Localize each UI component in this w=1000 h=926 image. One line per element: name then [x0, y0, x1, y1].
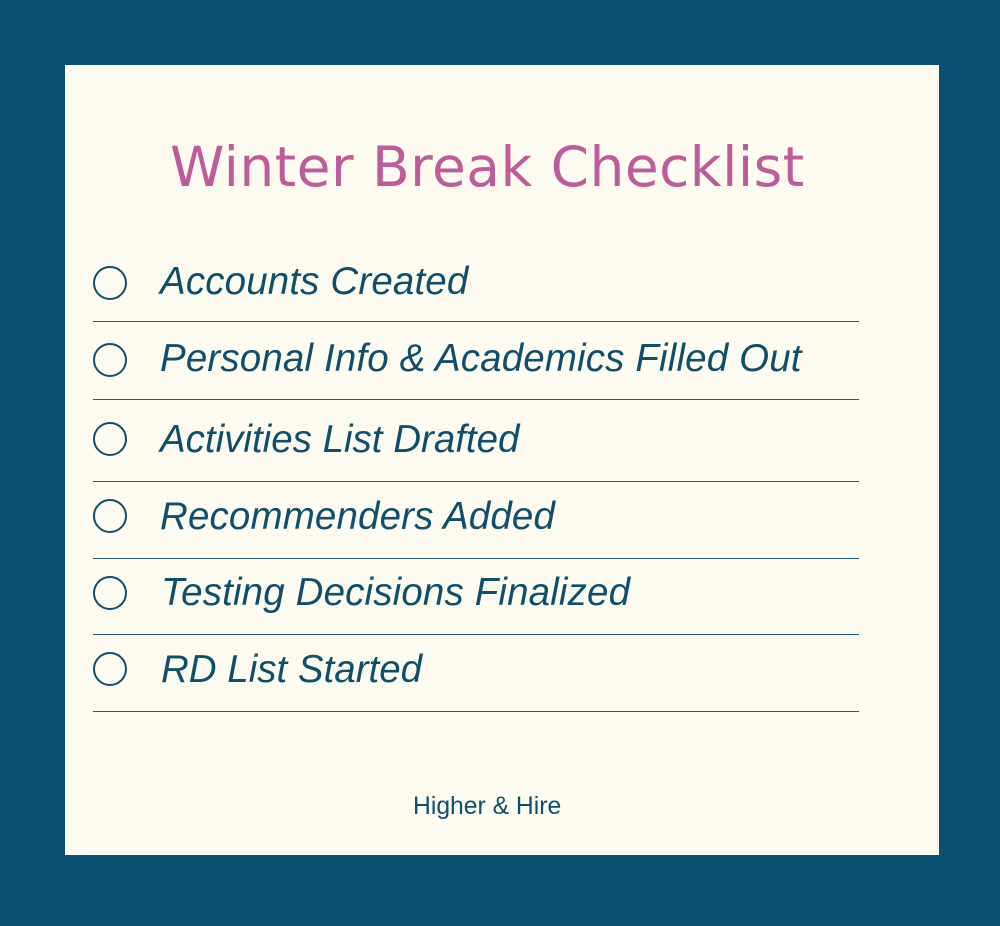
title: Winter Break Checklist [170, 135, 805, 199]
checklist item: Accounts Created [93, 260, 859, 322]
checklist item: RD List [93, 648, 859, 712]
text: Recommenders Added [160, 495, 555, 538]
text: Personal Info & Academics Filled Out [160, 337, 802, 380]
footer credit: Higher & Hire [413, 793, 561, 820]
checklist item: Recommenders [93, 495, 859, 559]
panel: checklist card [65, 65, 939, 855]
checklist item: Personal Info [93, 337, 859, 400]
text: Testing Decisions Finalized [161, 571, 630, 614]
checklist item: Activities List [93, 418, 859, 482]
text: Activities List Drafted [160, 418, 519, 461]
text: Accounts Created [160, 260, 468, 303]
checklist item: Testing Decisions [93, 571, 859, 635]
text: RD List Started [161, 648, 422, 691]
